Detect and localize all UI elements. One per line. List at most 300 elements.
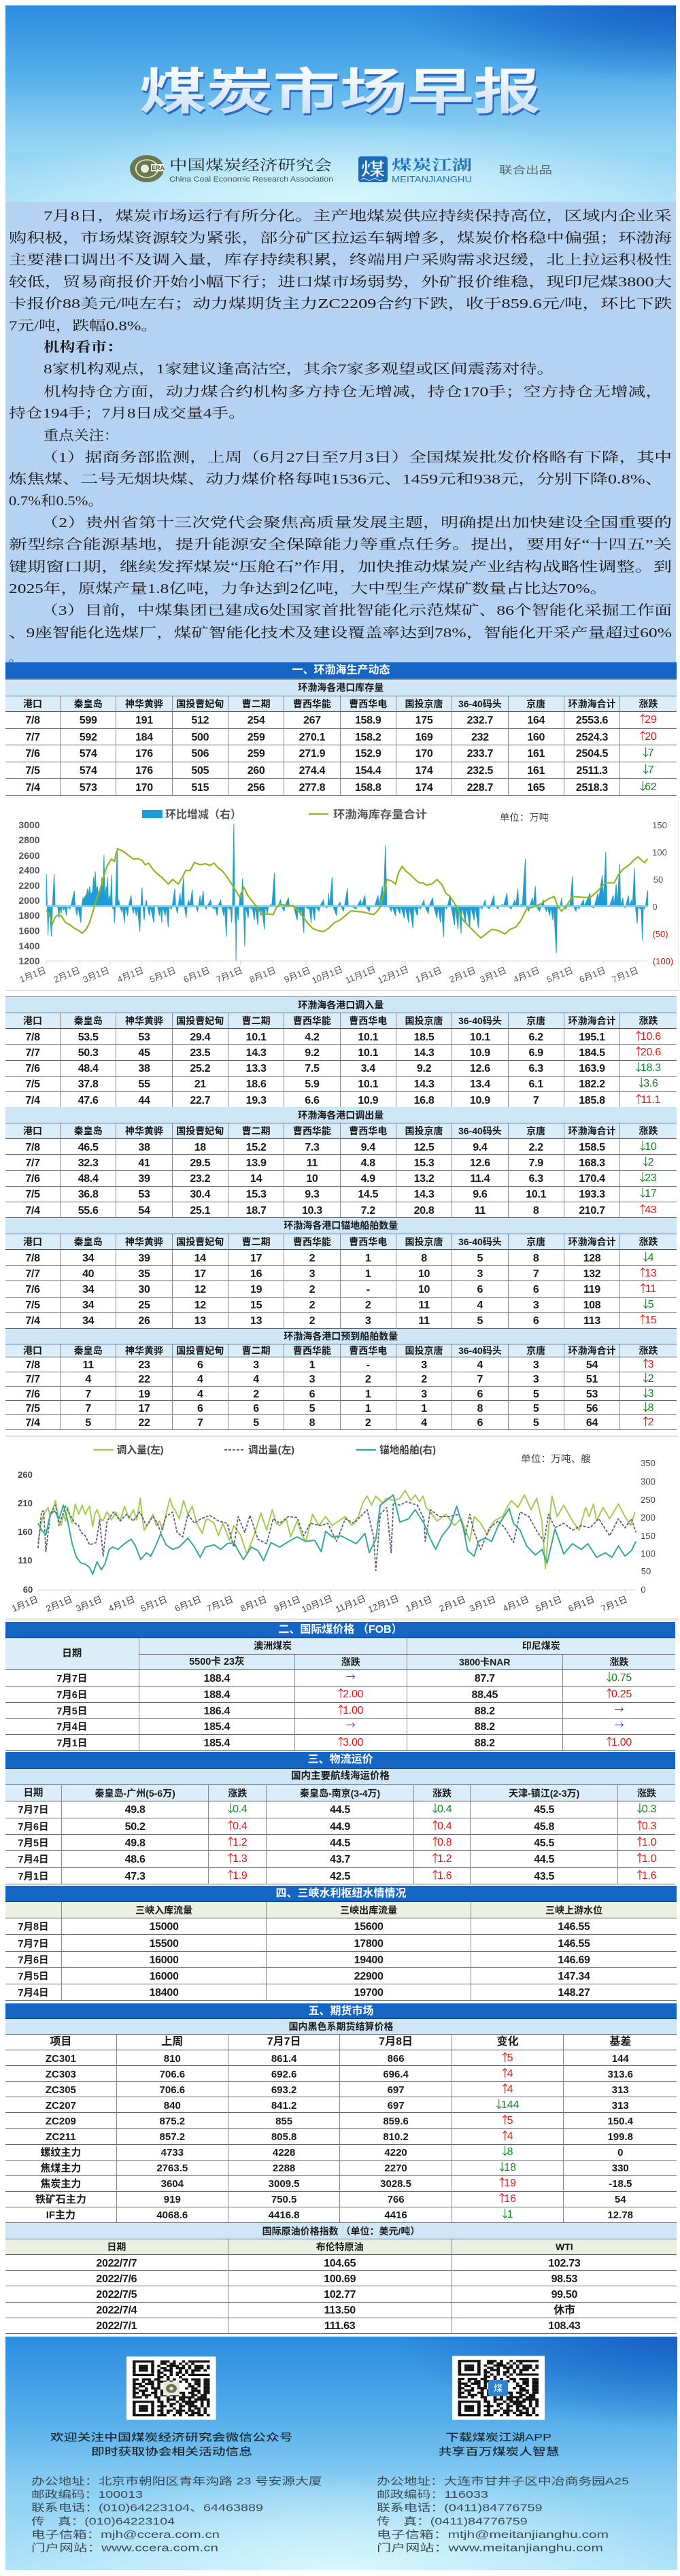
table: port inflow: 163.9 — [579, 1063, 605, 1074]
table: ferrous futures settlement: 12.78 — [607, 2209, 633, 2221]
section heading: 期货市场: 五、期货市场 — [308, 2005, 374, 2017]
paragraph: key point 1: 0.7%和0.5%。 — [9, 493, 103, 509]
x axis: 3月1日 — [82, 965, 111, 985]
table: anchored ships: 35 — [138, 1268, 150, 1280]
table: port outflow: 7/5 — [25, 1189, 40, 1200]
table: arriving ships: 5 — [309, 1403, 315, 1414]
table: ferrous futures settlement: 4220 — [384, 2147, 407, 2158]
table: port inflow: 10.9 — [470, 1095, 490, 1106]
logo: Meitanjianghu — [358, 156, 472, 184]
table: ferrous futures settlement: 5 — [507, 2115, 513, 2126]
table: port outflow: 2.2 — [529, 1142, 543, 1153]
table: port inventory: 神华黄骅 — [125, 698, 163, 709]
table: ferrous futures settlement: 840 — [164, 2100, 181, 2112]
table: port outflow: 10.3 — [302, 1205, 322, 1217]
table: ferrous futures settlement: 144 — [501, 2099, 519, 2111]
table: ferrous futures settlement: 0 — [617, 2147, 623, 2158]
table: port outflow: 10 — [306, 1173, 318, 1185]
section heading: 国际煤价格 — [5, 1622, 675, 1638]
table: port outflow: 曹西华电 — [349, 1125, 387, 1136]
caption: app download: 共享百万煤炭人智慧 — [439, 2445, 560, 2457]
table: port inventory: 228.7 — [467, 782, 493, 794]
legend: 单位：万吨 — [500, 812, 549, 823]
table: anchored ships: 环渤海合计 — [568, 1236, 615, 1247]
table: port inflow: 秦皇岛 — [74, 1015, 103, 1026]
contact block: Meitanjianghu: 邮政编码：116033 — [377, 2488, 488, 2500]
table: anchored ships: 2 — [309, 1284, 315, 1295]
table: coastal freight: ↑ — [430, 1866, 441, 1882]
table: anchored ships: 涨跌 — [639, 1236, 658, 1247]
table: arriving ships: 2 — [648, 1373, 653, 1385]
table: ferrous futures settlement: 313 — [612, 2084, 629, 2096]
table: anchored ships: 13 — [250, 1315, 262, 1327]
table: arriving ships: 4 — [197, 1389, 203, 1400]
table: port outflow: 8 — [533, 1205, 539, 1217]
table: port outflow: 14 — [250, 1173, 262, 1185]
table: port inflow: ↓ — [636, 1074, 647, 1090]
table: ferrous futures settlement: 810.2 — [383, 2131, 409, 2143]
table: anchored ships: 4 — [648, 1252, 653, 1264]
table: port inventory: 港口 — [23, 698, 42, 709]
table: port outflow: 14.3 — [414, 1189, 435, 1200]
table: port outflow: 17 — [645, 1188, 656, 1200]
title: 煤炭市场早报 — [139, 65, 541, 120]
table: anchored ships: 曹二期 — [242, 1236, 271, 1247]
logo: Meitanjianghu: MEITANJIANGHU — [392, 174, 472, 184]
table: port inflow: 7 — [533, 1095, 539, 1106]
table: coastal freight: 0.4 — [233, 1803, 248, 1815]
left axis: 2000 — [18, 895, 40, 906]
caption: CCERA WeChat: 即时获取协会相关活动信息 — [91, 2445, 252, 2457]
table: port inflow: 53.5 — [78, 1032, 99, 1043]
table: international crude oil index — [5, 2223, 677, 2334]
QR code: Meitanjianghu app — [452, 2356, 545, 2420]
table: anchored ships: 36-40码头 — [458, 1236, 502, 1247]
logo: China Coal Economic Research Association — [130, 155, 333, 184]
table: ferrous futures settlement: IF主力 — [46, 2209, 75, 2221]
table: port inventory: 176 — [135, 748, 153, 760]
table: port inflow: 18.6 — [246, 1079, 267, 1090]
table: international coal prices: ↑ — [604, 1733, 615, 1749]
paragraph: key point 1: 炼焦煤、二号无烟块煤、动力煤价格每吨1536元、1459元和938元，分别下降0.8%、 — [9, 471, 663, 487]
table: international coal prices: 88.2 — [475, 1706, 495, 1717]
table: port inventory: 曹西华电 — [349, 698, 387, 709]
x axis: 9月1日 — [273, 1594, 302, 1614]
table: port inventory: 254 — [248, 715, 265, 726]
table: arriving ships: 3 — [421, 1389, 427, 1400]
caption: CCERA WeChat — [50, 2430, 293, 2457]
table: port outflow: 10 — [645, 1141, 656, 1153]
table: international crude oil index: 2022/7/5 — [96, 2289, 137, 2301]
table: coastal freight: ↑ — [634, 1866, 645, 1882]
table: international coal prices: ↑ — [335, 1684, 346, 1701]
table: Three Gorges water conditions: 15000 — [150, 1921, 179, 1933]
table: port inflow: 36-40码头 — [458, 1015, 502, 1026]
QR code: CCERA WeChat — [126, 2356, 216, 2420]
table: arriving ships: 1 — [365, 1403, 371, 1414]
table: anchored ships: 34 — [82, 1300, 94, 1311]
table: port outflow: 10.1 — [526, 1189, 546, 1200]
table: port inventory: 184 — [135, 732, 153, 743]
table: ferrous futures settlement: 4 — [507, 2084, 513, 2095]
contact block: Meitanjianghu: 办公地址：大连市甘井子区中冶商务园A25 — [377, 2475, 629, 2487]
table: international coal prices: 涨跌 — [341, 1657, 360, 1667]
table: coastal freight: 48.6 — [125, 1854, 146, 1865]
table: port inventory: 169 — [415, 732, 432, 743]
table: port outflow: 11 — [475, 1205, 486, 1217]
table: anchored ships: 113 — [583, 1315, 600, 1327]
table: port outflow: 48.4 — [78, 1173, 99, 1185]
table: ferrous futures settlement: 螺纹主力 — [40, 2147, 81, 2158]
table: port inventory: 2553.6 — [576, 715, 608, 726]
table: coastal freight: ↑ — [634, 1849, 645, 1865]
table: port inventory: 环渤海各港口库存量 — [298, 682, 384, 693]
table: anchored ships: 京唐 — [526, 1236, 545, 1247]
table: port inventory: 573 — [80, 782, 97, 794]
table: ferrous futures settlement: 919 — [164, 2194, 181, 2205]
table: arriving ships: 曹西华电 — [349, 1345, 387, 1356]
table: port inventory: 500 — [191, 732, 209, 743]
x axis: 4月1日 — [107, 1594, 136, 1614]
table: coastal freight: 国内主要航线海运价格 — [291, 1771, 390, 1782]
table: Three Gorges water conditions — [5, 1902, 677, 2001]
section heading: 环渤海生产动态: 一、环渤海生产动态 — [292, 664, 390, 676]
table: anchored ships: 6 — [533, 1284, 539, 1295]
right axis: (50) — [652, 929, 668, 939]
table: arriving ships: 3 — [253, 1359, 259, 1371]
legend: 环比增减（右） — [165, 809, 241, 821]
table: coastal freight: ↑ — [634, 1816, 645, 1833]
table: port outflow: 168.3 — [579, 1157, 605, 1169]
table: ferrous futures settlement: 1 — [507, 2209, 513, 2220]
table: Three Gorges water conditions: 7月7日 — [18, 1939, 49, 1950]
table: anchored ships: 2 — [309, 1300, 315, 1311]
right axis: 150 — [641, 1531, 656, 1541]
contact block: CCERA — [31, 2475, 322, 2554]
table: port outflow: 46.5 — [78, 1142, 99, 1153]
table: port inflow: 29.4 — [190, 1032, 210, 1043]
table: port inventory: 506 — [191, 748, 209, 760]
table: international coal prices: ↓ — [604, 1668, 615, 1684]
table: arriving ships: 7 — [85, 1403, 91, 1414]
table: anchored ships: 132 — [583, 1268, 600, 1280]
x axis: 12月1日 — [367, 1593, 401, 1614]
table: arriving ships: 36-40码头 — [458, 1345, 502, 1356]
table: port inflow: 7/6 — [25, 1063, 40, 1074]
paragraph: key point 1 — [9, 450, 672, 509]
table: port inflow: 7/4 — [25, 1095, 40, 1106]
table: port outflow: 29.5 — [190, 1157, 210, 1169]
table: ferrous futures settlement: 693.2 — [271, 2084, 296, 2096]
table: port outflow: 涨跌 — [639, 1125, 658, 1136]
table: coastal freight: ↑ — [430, 1816, 441, 1833]
table: port inventory: ↓ — [641, 760, 651, 777]
co-production note: 联合出品 — [499, 165, 552, 176]
table: arriving ships: 4 — [197, 1374, 203, 1385]
table: international coal prices: ↑ — [604, 1684, 615, 1701]
table: ferrous futures settlement: 4068.6 — [156, 2209, 188, 2221]
contact block: Meitanjianghu: 门户网站：www.meitanjianghu.com — [377, 2542, 603, 2554]
table: international crude oil index: 休市 — [554, 2305, 575, 2316]
table: port inflow: ↓ — [633, 1058, 644, 1074]
table: ferrous futures settlement: 866 — [388, 2053, 405, 2065]
x axis: 2月1日 — [52, 965, 82, 985]
table: international crude oil index: 102.73 — [548, 2258, 580, 2269]
contact block: Meitanjianghu — [377, 2475, 629, 2554]
table: ferrous futures settlement: 3604 — [161, 2178, 184, 2190]
right axis: 250 — [641, 1495, 656, 1505]
section heading: 物流运价: 三、物流运价 — [307, 1754, 373, 1765]
table: port inventory: 232.7 — [467, 715, 493, 726]
table: ferrous futures settlement: 855 — [275, 2116, 292, 2127]
table: port inflow: 182.2 — [579, 1079, 605, 1090]
table: port outflow: 7/6 — [25, 1173, 40, 1185]
table: port inflow: 曹二期 — [242, 1015, 271, 1026]
table: anchored ships: ↑ — [638, 1279, 649, 1295]
table: port outflow: 9.6 — [473, 1189, 488, 1200]
table: port inventory: 29 — [645, 714, 656, 726]
table: international crude oil index: 布伦特原油 — [316, 2241, 364, 2252]
table: anchored ships: 108 — [583, 1300, 600, 1311]
contact block: CCERA: 传 真：(010)64223104 — [31, 2515, 175, 2527]
table: port inventory: 191 — [135, 715, 153, 726]
table: port outflow: 神华黄骅 — [125, 1125, 163, 1136]
x axis: 4月1日 — [512, 965, 541, 985]
table: port inventory: 2518.3 — [576, 782, 608, 794]
table: port inventory: 曹二期 — [242, 698, 271, 709]
table: ferrous futures settlement: 7月8日 — [379, 2036, 413, 2048]
table: coastal freight: 44.9 — [330, 1821, 350, 1833]
paragraph: key point 2: 2025年，原煤产量1.8亿吨，力争达到2亿吨，大中型生产煤矿数量占比达70%。 — [9, 581, 607, 596]
table: international coal prices: 7月6日 — [56, 1690, 87, 1701]
legend: 调入量(左) — [117, 1444, 164, 1456]
table: ferrous futures settlement: 4416.8 — [269, 2209, 300, 2221]
table: port inventory: 174 — [415, 782, 432, 794]
table: port outflow: 曹二期 — [242, 1125, 271, 1136]
x axis: 6月1日 — [182, 965, 211, 985]
table: port outflow: 13.2 — [414, 1173, 435, 1185]
table: port inflow: 10.1 — [358, 1079, 378, 1090]
legend: 环渤海库存量合计 — [333, 808, 427, 821]
table: ferrous futures settlement: 330 — [612, 2163, 629, 2174]
table: port inflow: 55 — [138, 1079, 150, 1090]
table: anchored ships: 神华黄骅 — [125, 1236, 163, 1247]
table: arriving ships: 23 — [138, 1359, 150, 1371]
left axis: 1400 — [18, 940, 40, 951]
table: coastal freight: 50.2 — [125, 1821, 146, 1833]
right axis: 0 — [641, 1584, 646, 1595]
table: arriving ships: 1 — [365, 1389, 371, 1400]
table: port outflow: ↓ — [637, 1168, 648, 1185]
table: Three Gorges water conditions: 22900 — [354, 1971, 384, 1982]
right axis: 100 — [652, 847, 667, 858]
table: coastal freight: 涨跌 — [432, 1788, 452, 1799]
table: port inflow: 11.1 — [641, 1094, 660, 1106]
right axis: 200 — [641, 1512, 656, 1523]
table: ferrous futures settlement: 国内黑色系期货结算价格 — [289, 2021, 394, 2032]
table: port inventory — [5, 680, 677, 796]
table: anchored ships: ↓ — [641, 1248, 651, 1264]
table: port outflow: 210.7 — [579, 1205, 605, 1217]
table: international coal prices: 188.4 — [204, 1673, 230, 1684]
table: port inventory: 270.1 — [299, 732, 325, 743]
table: international coal prices: 185.4 — [204, 1721, 230, 1733]
table: port inflow: 10.1 — [470, 1032, 490, 1043]
table: Three Gorges water conditions: 148.27 — [558, 1987, 590, 1999]
right axis: 350 — [641, 1458, 656, 1468]
table: ferrous futures settlement: ↑ — [500, 2080, 511, 2096]
table: ferrous futures settlement — [5, 2019, 677, 2223]
logo: Meitanjianghu: 煤 — [360, 159, 385, 180]
table: port outflow: 13.9 — [246, 1157, 267, 1169]
table: arriving ships: 6 — [477, 1417, 483, 1429]
table: port inflow: 23.5 — [190, 1047, 210, 1059]
table: anchored ships: 曹西华能 — [293, 1236, 331, 1247]
table: ferrous futures settlement: 焦煤主力 — [40, 2163, 81, 2174]
table: anchored ships: 7/8 — [25, 1253, 40, 1264]
table: coastal freight: ↑ — [430, 1849, 441, 1865]
table: arriving ships: 5 — [533, 1417, 539, 1429]
lines: inflow, outflow, anchored ships — [38, 1491, 636, 1574]
x axis: 6月1日 — [578, 965, 607, 985]
table: port inflow: ↑ — [633, 1027, 644, 1043]
table: arriving ships: 曹二期 — [242, 1345, 271, 1356]
table: port outflow: 39 — [138, 1173, 150, 1185]
contact block: CCERA: 办公地址：北京市朝阳区青年沟路 23 号安源大厦 — [31, 2475, 322, 2487]
table: port outflow: 23.2 — [190, 1173, 210, 1185]
x axis: 4月1日 — [116, 965, 145, 985]
table: port outflow: 秦皇岛 — [74, 1125, 103, 1136]
table: port outflow: 14.5 — [358, 1189, 378, 1200]
right axis: 150 — [652, 820, 667, 830]
table: coastal freight: 天津-镇江(2-3万) — [509, 1788, 579, 1799]
table: coastal freight: 1.3 — [233, 1853, 248, 1865]
table: port inflow: 6.9 — [529, 1047, 543, 1059]
table: port inflow: 10.1 — [358, 1032, 378, 1043]
table: ferrous futures settlement: 875.2 — [160, 2116, 185, 2127]
table: arriving ships: 11 — [83, 1359, 94, 1371]
table: port inflow: ↑ — [633, 1043, 644, 1059]
table: ferrous futures settlement: ↓ — [500, 2205, 511, 2221]
table: Three Gorges water conditions: 19400 — [354, 1954, 384, 1966]
table: international coal prices: 7月4日 — [56, 1722, 87, 1733]
table: port inventory: 国投曹妃甸 — [176, 698, 224, 709]
table: port inventory: 505 — [191, 765, 209, 777]
table: arriving ships: 1 — [309, 1359, 315, 1371]
table: coastal freight: 47.3 — [125, 1871, 146, 1882]
table: port outflow: 158.5 — [579, 1142, 605, 1153]
table: port inventory: 62 — [645, 781, 656, 793]
table: port outflow: 国投京唐 — [405, 1125, 443, 1136]
table: port outflow: 曹西华能 — [293, 1125, 331, 1136]
table: anchored ships: 16 — [250, 1268, 262, 1280]
table: anchored ships: 3 — [309, 1268, 315, 1280]
section heading: 三峡水利枢纽水情情况 — [5, 1886, 677, 1902]
QR code: Meitanjianghu app: 煤 — [494, 2383, 503, 2393]
table: ferrous futures settlement: ZC301 — [46, 2053, 76, 2065]
logo: China Coal Economic Research Association: ERA — [152, 165, 165, 171]
table: international crude oil index: 99.50 — [551, 2289, 577, 2301]
table: international coal prices: 185.4 — [204, 1738, 230, 1749]
section heading: 物流运价 — [5, 1752, 675, 1769]
table: port inflow: 20.6 — [641, 1047, 661, 1058]
table: port inflow: 4.2 — [305, 1032, 320, 1043]
table: arriving ships: 19 — [138, 1389, 150, 1400]
table: ferrous futures settlement: ↑ — [500, 2111, 511, 2127]
left axis: 1600 — [18, 925, 40, 936]
table: port inventory: 158.8 — [355, 782, 381, 794]
table: arriving ships: 曹西华能 — [293, 1345, 331, 1356]
table: port inflow: 13.3 — [246, 1063, 267, 1074]
table: port inflow: 38 — [138, 1063, 150, 1074]
table: arriving ships: 6 — [309, 1389, 315, 1400]
table: port outflow: 55.6 — [78, 1205, 99, 1217]
table: arriving ships: 53 — [586, 1389, 598, 1400]
table: ferrous futures settlement: ZC305 — [46, 2084, 76, 2096]
table: port inventory: 599 — [80, 715, 97, 726]
table: Three Gorges water conditions: 7月4日 — [18, 1988, 49, 1999]
table: ferrous futures settlement: 19 — [504, 2177, 516, 2189]
table: arriving ships: 6 — [197, 1403, 203, 1414]
logo: China Coal Economic Research Association: 中国煤炭经济研究会 — [169, 157, 332, 173]
table: anchored ships — [5, 1218, 677, 1329]
table: port inflow: 3.6 — [643, 1078, 658, 1089]
table: port inventory: 秦皇岛 — [74, 698, 103, 709]
table: anchored ships: 国投京唐 — [405, 1236, 443, 1247]
table: arriving ships: 1 — [421, 1403, 427, 1414]
paragraph: key point 2: 键期窗口期，继续发挥煤炭“压舱石”作用，加快推动煤炭产业结构战略性调整。到 — [9, 559, 672, 575]
table: port inflow: 7/7 — [25, 1047, 40, 1059]
table: arriving ships: 7 — [477, 1374, 483, 1385]
table: port inflow: 37.8 — [78, 1079, 99, 1090]
table: port outflow: 41 — [138, 1157, 150, 1169]
table: international crude oil index: 2022/7/7 — [96, 2258, 137, 2269]
table: anchored ships: ↑ — [637, 1264, 648, 1280]
table: ferrous futures settlement: ↑ — [496, 2189, 507, 2205]
table: anchored ships: 34 — [82, 1315, 94, 1327]
table: port inventory: 7 — [648, 764, 653, 776]
table: anchored ships: 26 — [138, 1315, 150, 1327]
table: arriving ships: 2 — [253, 1389, 259, 1400]
table: Three Gorges water conditions: 18400 — [150, 1987, 179, 1999]
table: coastal freight: ↑ — [225, 1833, 236, 1849]
table: international coal prices: 2.00 — [343, 1689, 363, 1700]
table: ferrous futures settlement: 4 — [507, 2131, 513, 2142]
footer panel — [5, 2337, 677, 2570]
table: port inventory: 174 — [415, 765, 432, 777]
table: ferrous futures settlement: ↑ — [500, 2048, 511, 2065]
table: coastal freight: 0.4 — [233, 1820, 248, 1832]
table: arriving ships: ↑ — [641, 1355, 651, 1371]
table: international coal prices: ↑ — [335, 1701, 346, 1717]
table: port inflow: 9.2 — [305, 1047, 320, 1059]
table: port outflow: 12.6 — [470, 1157, 490, 1169]
table: international coal prices: 1.00 — [343, 1705, 363, 1716]
table: ferrous futures settlement: 上周 — [161, 2036, 183, 2048]
table: port inventory: 国投京唐 — [405, 698, 443, 709]
table: arriving ships: 8 — [309, 1417, 315, 1429]
table: Three Gorges water conditions: 146.69 — [558, 1954, 590, 1966]
table: port inflow: 6.1 — [529, 1079, 543, 1090]
table: coastal freight: 45.5 — [534, 1837, 554, 1849]
legend — [142, 808, 549, 823]
table: port inflow: 25.2 — [190, 1063, 210, 1074]
table: arriving ships: 3 — [533, 1359, 539, 1371]
table: arriving ships: 6 — [197, 1359, 203, 1371]
table: ferrous futures settlement: 766 — [388, 2194, 405, 2205]
legend — [94, 1444, 591, 1464]
table: port outflow: ↓ — [637, 1137, 648, 1153]
